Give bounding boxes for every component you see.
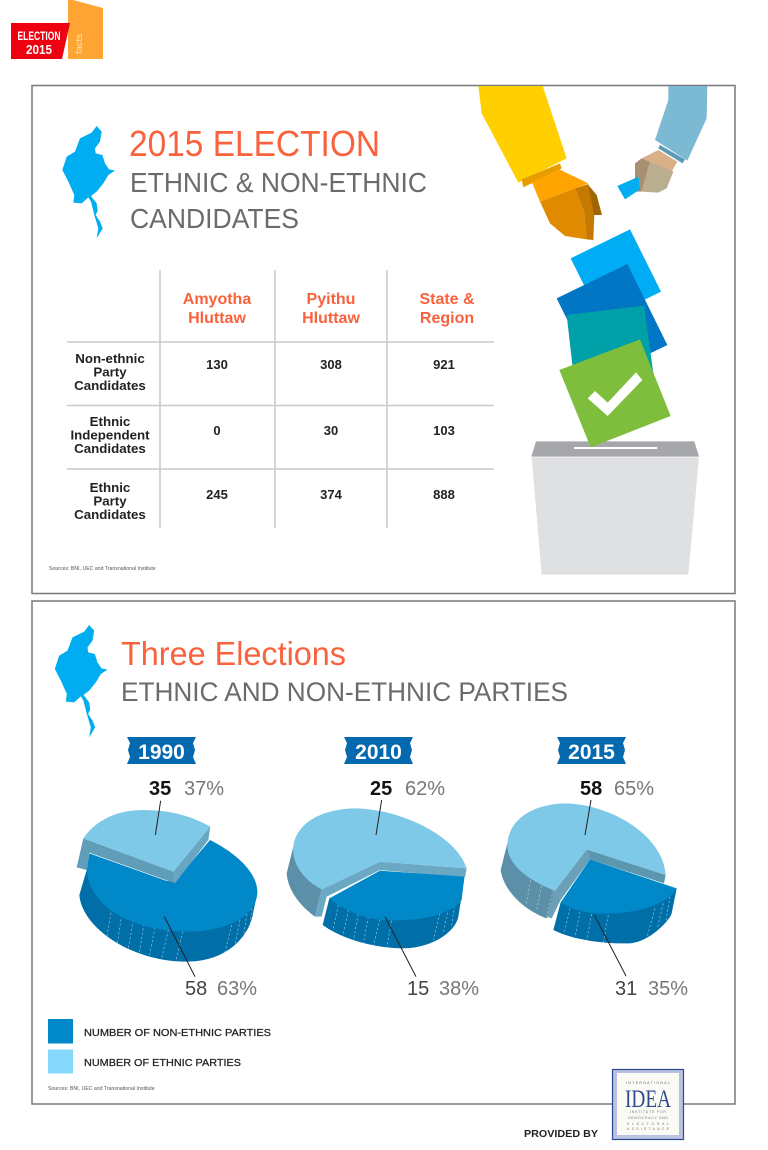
table: candidates by chamber: Ethnic [90,480,130,495]
label: non-ethnic parties 1990: 63% [217,978,257,1000]
subheading: ethnic and non-ethnic candidates: CANDIDATES [130,203,299,234]
table: candidates by chamber: Party [93,494,127,508]
table: candidates by chamber: 130 [206,357,228,372]
panel: three elections [32,601,735,1104]
table: candidates by chamber: Pyithu [307,291,355,308]
label: non-ethnic parties 2010: 15 [407,978,429,1000]
label: non-ethnic parties 2015: 35% [648,978,688,1000]
table: candidates by chamber: Hluttaw [188,310,246,327]
subheading: ethnic and non-ethnic parties: ETHNIC AND NON-ETHNIC PARTIES [121,677,568,707]
table: candidates by chamber: 374 [320,487,343,502]
table: candidates by chamber: Ethnic [90,414,130,429]
table: candidates by chamber: State & [419,291,475,308]
logo: International IDEA: INTERNATIONAL [626,1081,670,1085]
pie chart: 2015 [501,737,688,1000]
legend: NUMBER OF NON-ETHNIC PARTIES [84,1027,271,1039]
label: ethnic parties 1990: 35 [149,778,171,800]
banner: 2010: 2010 [355,741,402,764]
label: ethnic parties 2015 [580,778,654,800]
logo: International IDEA: ASSISTANCE [627,1127,670,1131]
table: candidates by chamber: 308 [320,357,342,372]
subheading: ethnic and non-ethnic candidates: ETHNIC & NON-ETHNIC [130,167,427,198]
logo: Election 2015 facts: 2015 [26,42,52,57]
pie chart: 2010 [287,737,479,1000]
subheading: ethnic and non-ethnic candidates [130,167,427,234]
legend: NUMBER OF ETHNIC PARTIES [84,1057,241,1069]
table: candidates by chamber: Party [93,364,127,380]
table: candidates by chamber: Hluttaw [302,310,360,327]
logo: Election 2015 facts [11,0,103,59]
label: ethnic parties 2010 [370,778,445,800]
label: ethnic parties 1990: 37% [184,778,224,800]
icon: Myanmar map [55,625,107,737]
table: candidates by chamber: 888 [433,487,455,502]
table: candidates by chamber: Candidates [74,507,146,522]
heading: three elections: Three Elections [121,635,346,672]
label: non-ethnic parties 2010: 38% [439,978,479,1000]
label: ethnic parties 1990 [149,778,224,800]
label: ethnic parties 2010: 25 [370,778,392,800]
label: non-ethnic parties 1990: 58 [185,978,207,1000]
banner: 2015: 2015 [568,741,615,764]
logo: International IDEA: INSTITUTE FOR [630,1110,666,1114]
table: candidates by chamber: Amyotha [183,291,251,308]
label: ethnic parties 2010: 62% [405,778,445,800]
label: ethnic parties 2015: 65% [614,778,654,800]
pie chart: 1990 [77,737,257,1000]
label: non-ethnic parties 2010 [407,978,479,1000]
table: candidates by chamber: 30 [324,423,338,438]
logo: Election 2015 facts: facts [74,34,85,54]
table: candidates by chamber: 0 [213,423,221,438]
heading: 2015 Election: 2015 ELECTION [129,123,380,164]
icon: Myanmar map [62,126,115,238]
label: non-ethnic parties 2015: 31 [615,978,637,1000]
logo: International IDEA [612,1069,684,1140]
banner: 1990: 1990 [138,741,185,764]
credit: provided by: PROVIDED BY [524,1129,598,1140]
logo: Election 2015 facts: ELECTION [18,31,60,43]
label: ethnic parties 2015: 58 [580,778,602,800]
legend [48,1019,271,1074]
table: candidates by chamber: Candidates [74,441,146,456]
source note: Sources: BNI, UEC and Transnational Institute [48,1086,155,1092]
logo: International IDEA: ELECTORAL [627,1122,669,1126]
source note: Sources: BNI, UEC and Transnational Institute [49,566,156,572]
label: non-ethnic parties 1990 [185,978,257,1000]
table: candidates by chamber: 921 [433,357,455,372]
logo: International IDEA: DEMOCRACY AND [628,1116,668,1120]
illustration: hands casting ballots into box [478,86,707,575]
banner: 2015 [557,737,626,764]
table: candidates by chamber [67,270,494,528]
table: candidates by chamber: Non-ethnic [75,351,145,366]
table: candidates by chamber: Region [420,310,474,327]
table: candidates by chamber: 103 [433,423,455,438]
table: candidates by chamber: Independent [70,428,150,442]
table: candidates by chamber: 245 [206,487,228,502]
label: non-ethnic parties 2015 [615,978,688,1000]
banner: 1990 [127,737,196,764]
logo: International IDEA: IDEA [625,1086,671,1113]
table: candidates by chamber: Candidates [74,378,146,393]
banner: 2010 [344,737,413,764]
panel: candidates [32,86,735,594]
